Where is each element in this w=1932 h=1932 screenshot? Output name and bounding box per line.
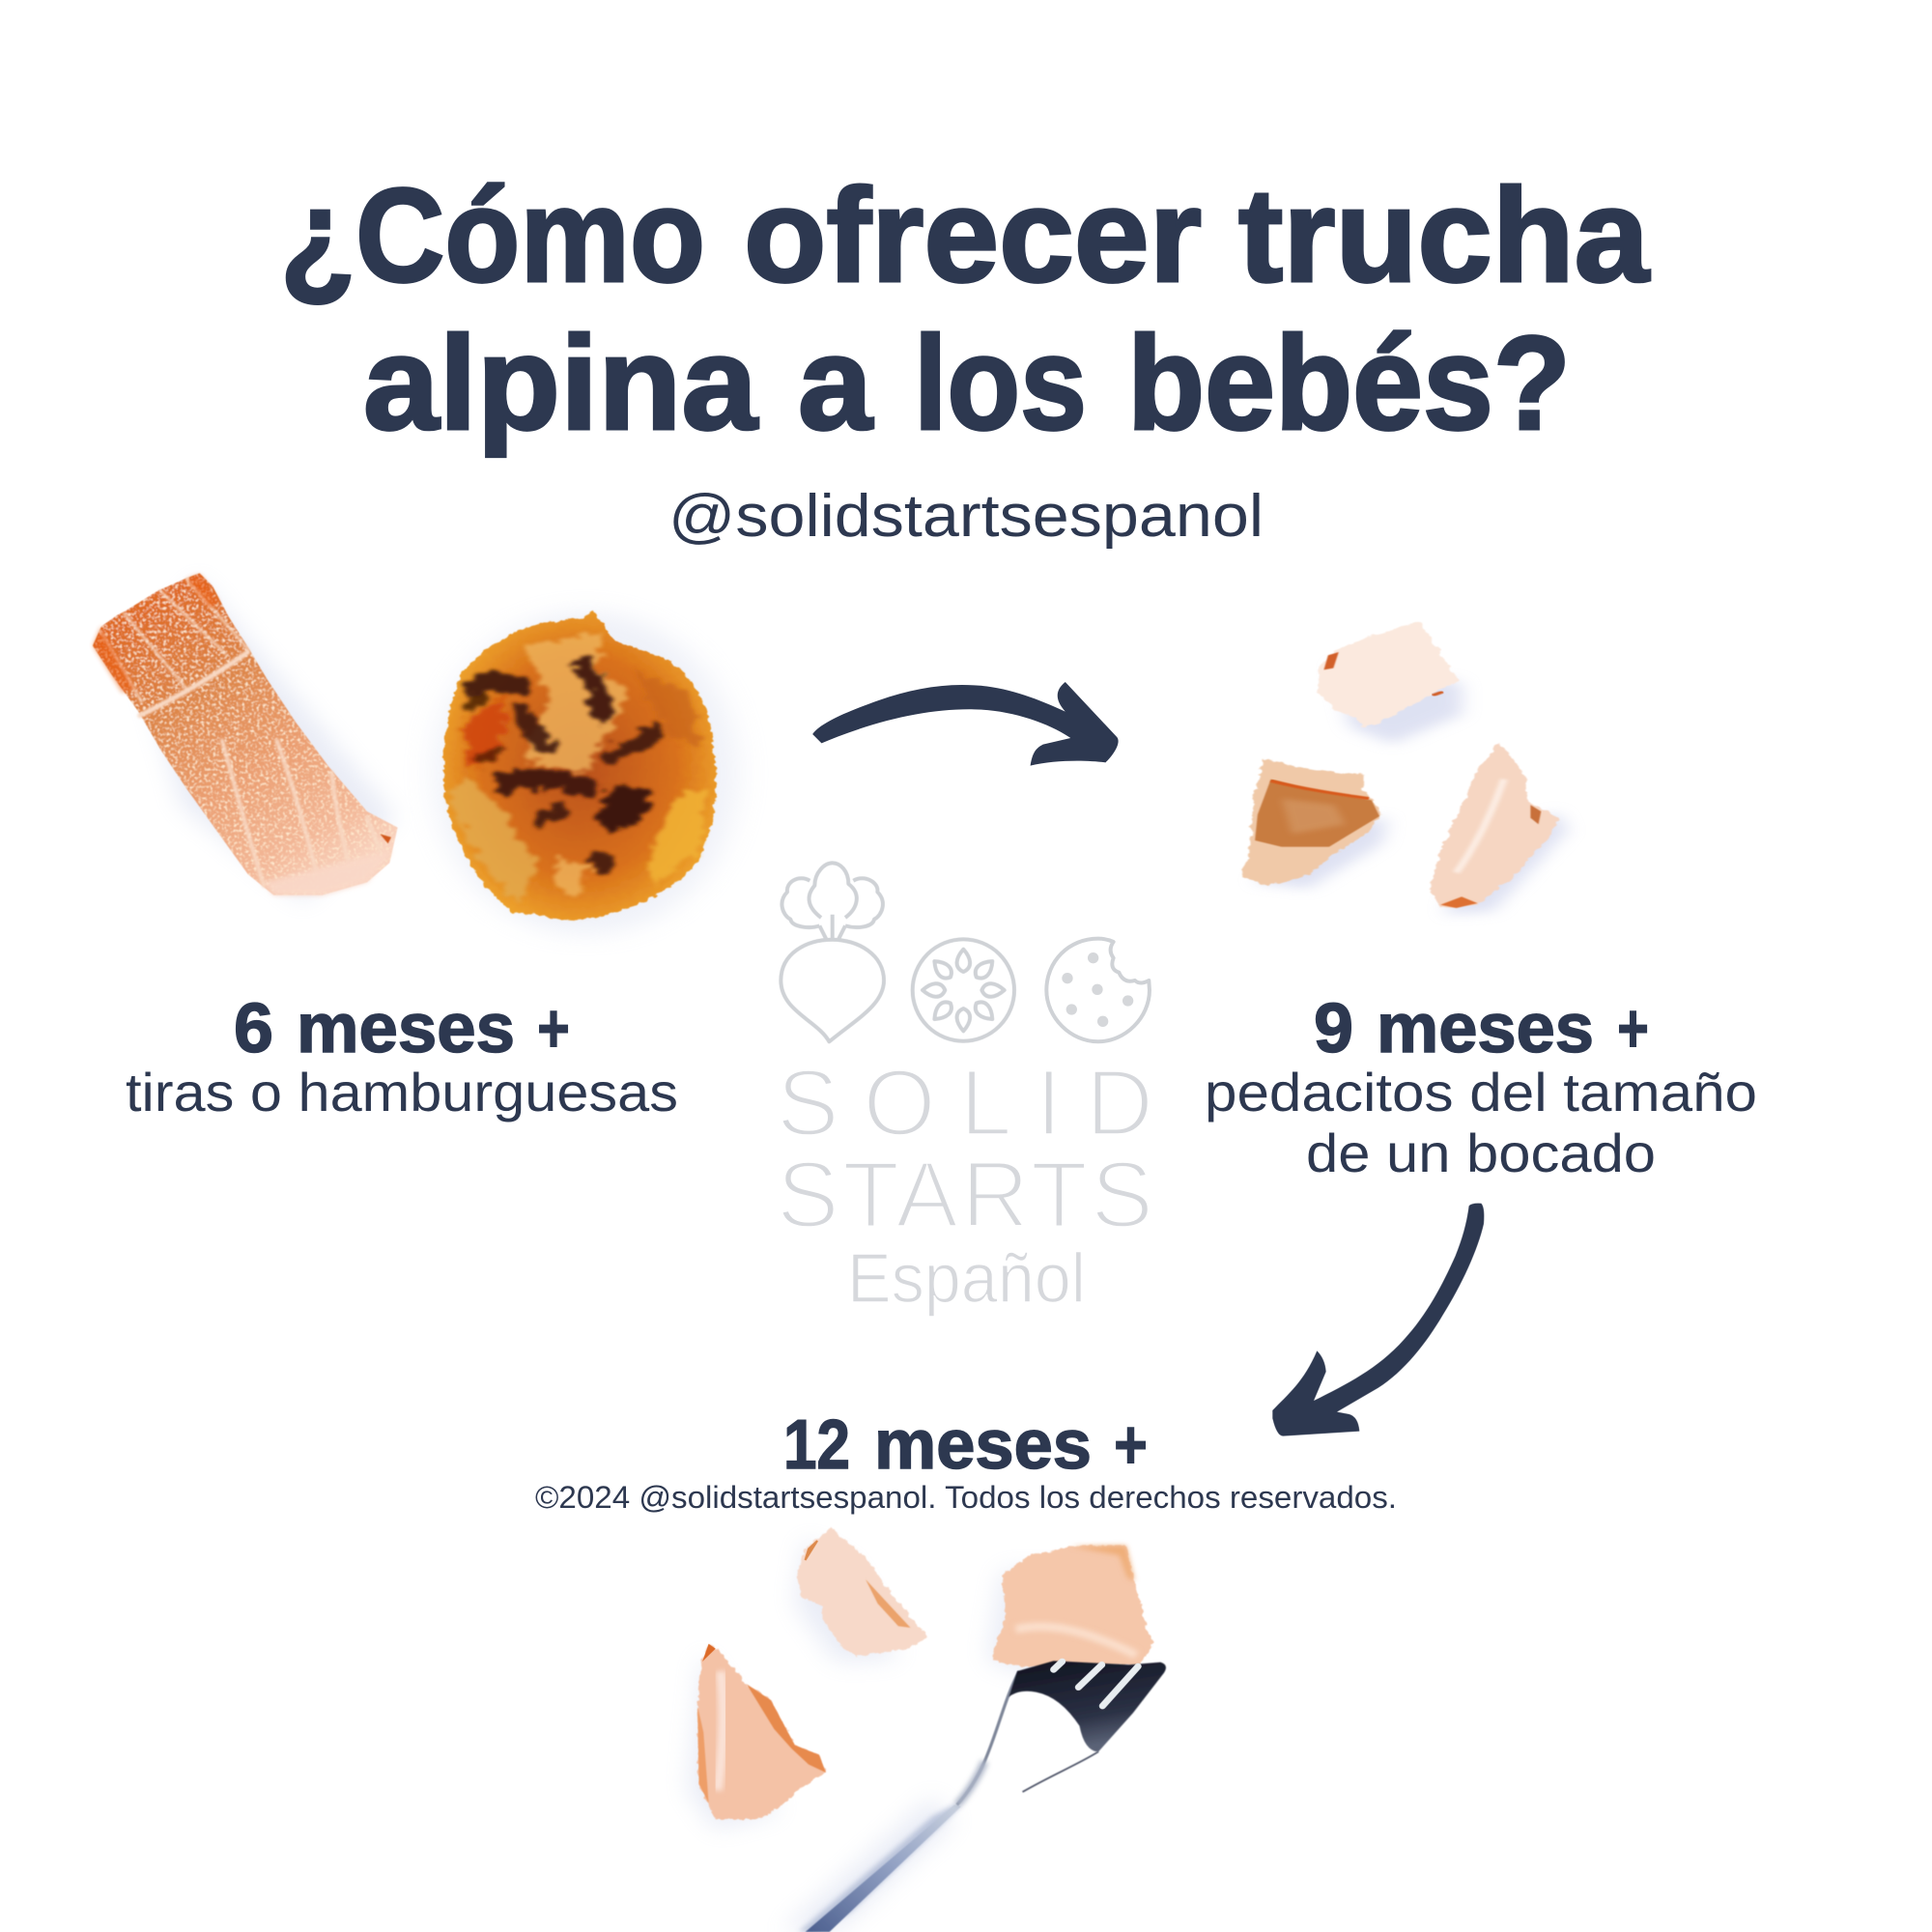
label: six months: tiras o hamburguesas: [126, 1062, 678, 1122]
piece: long pale chunk: [1430, 742, 1560, 908]
title: ofrecer: [744, 161, 1202, 310]
photo: three bite-sized pieces: [1241, 622, 1568, 915]
watermark wordmark: Español: [847, 1240, 1086, 1318]
watermark wordmark: SOLID: [777, 1050, 1153, 1155]
arrow: nine to twelve months: [1272, 1204, 1484, 1436]
watermark wordmark: STARTS: [777, 1142, 1153, 1247]
label: twelve months: +: [1114, 1406, 1148, 1484]
icon: turnip: [781, 863, 884, 1041]
watermark wordmark: [777, 1050, 1153, 1318]
label: nine months: [1205, 990, 1757, 1183]
label: nine months: 9: [1314, 990, 1353, 1067]
label: nine months: pedacitos del tamaño: [1205, 1062, 1757, 1122]
piece: skin side chunk: [1241, 758, 1382, 886]
title: a: [798, 309, 873, 458]
copyright: ©2024 @solidstartsespanol. Todos los derechos reservados.: [535, 1480, 1397, 1515]
label: six months: 6: [234, 990, 273, 1067]
title: [280, 161, 1650, 458]
title: ¿Cómo: [280, 161, 705, 310]
watermark logo: [781, 863, 1150, 1041]
title: alpina: [363, 309, 758, 458]
label: twelve months: meses: [874, 1406, 1092, 1484]
photo: pieces and fork: [688, 1528, 1166, 1932]
label: six months: [126, 990, 678, 1122]
icon: fork: [798, 1661, 1166, 1932]
icon: cucumber slice: [913, 939, 1014, 1041]
label: nine months: +: [1617, 990, 1649, 1067]
label: six months: +: [537, 990, 570, 1067]
piece: left triangle: [697, 1644, 826, 1819]
label: nine months: meses: [1377, 990, 1594, 1067]
label: twelve months: 12: [783, 1406, 850, 1484]
photo: fish burger: [435, 611, 737, 934]
photo: salmon strip: [93, 573, 398, 901]
label: twelve months: [783, 1406, 1148, 1484]
title: trucha: [1238, 161, 1650, 310]
title: bebés?: [1127, 309, 1571, 458]
label: nine months: de un bocado: [1306, 1122, 1656, 1183]
label: six months: meses: [297, 990, 515, 1067]
icon: bitten cookie: [1046, 939, 1150, 1041]
handle: @solidstartsespanol: [668, 483, 1264, 550]
piece: top triangle: [797, 1528, 927, 1657]
title: los: [914, 309, 1087, 458]
piece: top pale chunk: [1318, 622, 1459, 727]
piece: square bite: [993, 1546, 1153, 1666]
arrow: six to nine months: [812, 682, 1119, 766]
